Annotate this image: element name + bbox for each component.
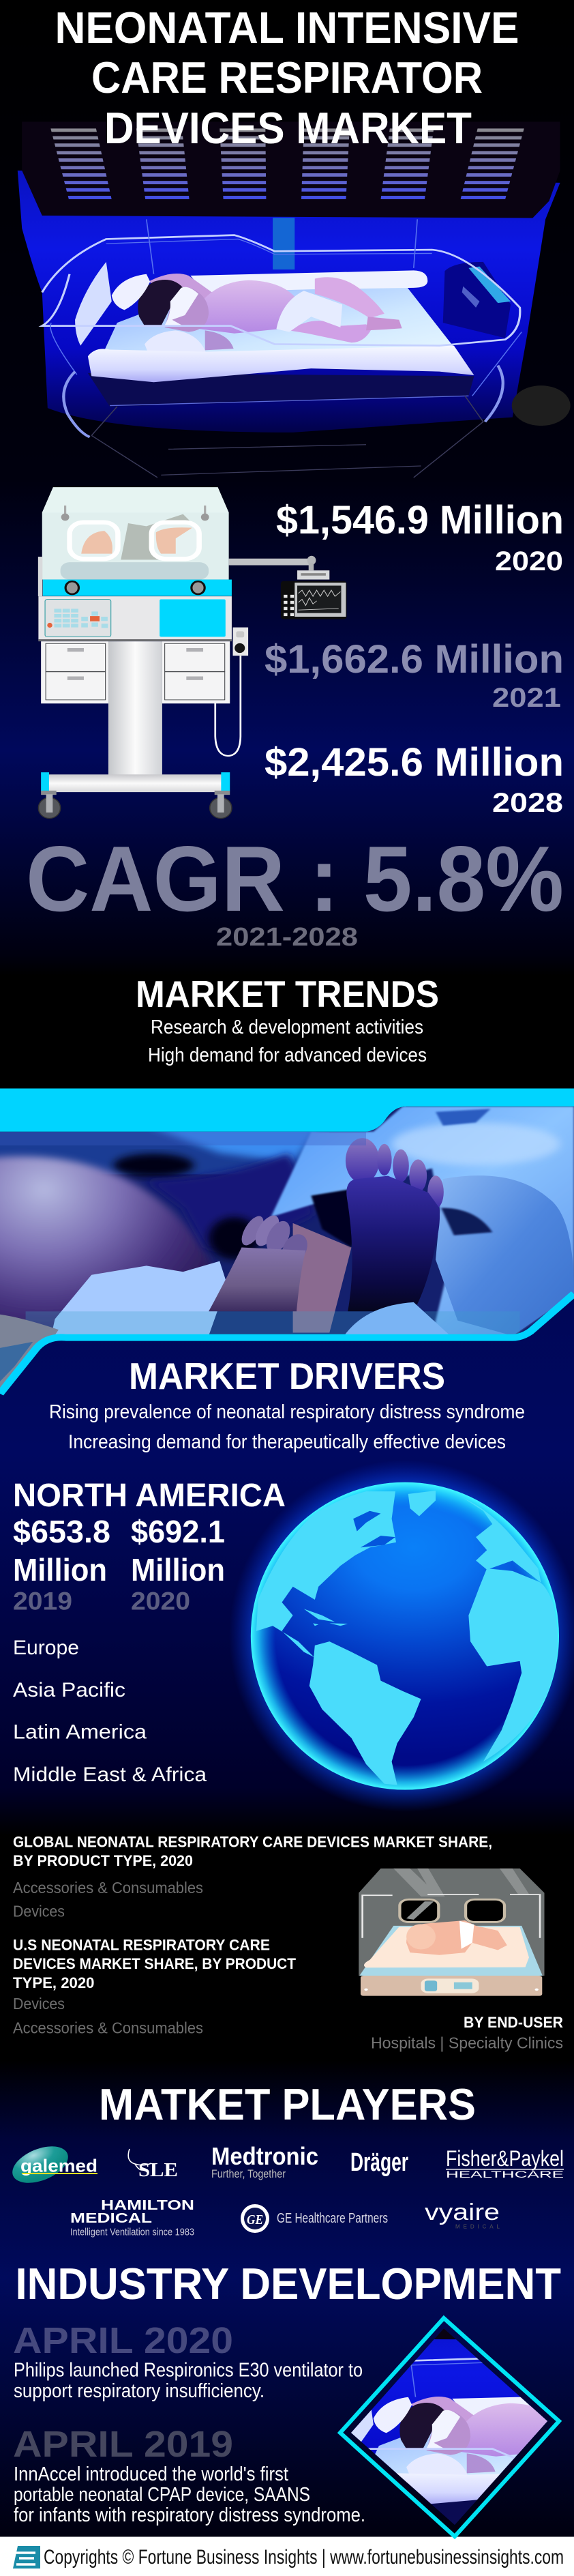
logo: Medtronic: Medtronic bbox=[211, 2142, 318, 2170]
development: April 2020: Philips launched Respironics E30 ventilator to bbox=[14, 2360, 363, 2382]
market players heading: MATKET PLAYERS bbox=[99, 2079, 476, 2129]
market size figures: $1,546.9 Million bbox=[276, 498, 564, 542]
logo: Vyaire Medical: MEDICAL bbox=[455, 2224, 500, 2230]
regional figures: 2020 bbox=[131, 1587, 190, 1615]
regional figures bbox=[13, 1478, 286, 1786]
regional figures: 2019 bbox=[13, 1587, 72, 1615]
logo: Medtronic: Further, Together bbox=[211, 2167, 286, 2180]
regional figures: Europe bbox=[13, 1637, 79, 1659]
logo: GE Healthcare Partners: GE bbox=[247, 2212, 263, 2227]
footer bar bbox=[0, 2536, 574, 2576]
globe bbox=[229, 1460, 574, 1812]
regional figures: Million bbox=[13, 1552, 107, 1587]
logo: Hamilton Medical bbox=[70, 2198, 194, 2238]
development: April 2019: for infants with respiratory distress syndrome. bbox=[14, 2504, 365, 2526]
market share by product type: BY PRODUCT TYPE, 2020 bbox=[13, 1852, 193, 1869]
by end-user bbox=[371, 2014, 563, 2052]
market share by product type: U.S NEONATAL RESPIRATORY CARE bbox=[13, 1936, 270, 1954]
market share by product type: GLOBAL NEONATAL RESPIRATORY CARE DEVICES MARKET SHARE, bbox=[13, 1834, 492, 1850]
development: April 2019: APRIL 2019 bbox=[13, 2424, 233, 2465]
market size figures: 2028 bbox=[492, 788, 563, 818]
title: CARE RESPIRATOR bbox=[91, 53, 483, 102]
logo: Fisher & Paykel Healthcare: HEALTHCARE bbox=[446, 2169, 564, 2180]
market size figures: $2,425.6 Million bbox=[265, 740, 564, 785]
logo: galemed bbox=[7, 2139, 97, 2190]
regional figures: Asia Pacific bbox=[13, 1679, 125, 1701]
development: April 2020: APRIL 2020 bbox=[13, 2320, 233, 2361]
logo: galemed: galemed bbox=[20, 2156, 97, 2176]
regional figures: $692.1 bbox=[131, 1514, 225, 1549]
logo: Dräger: Dräger bbox=[350, 2148, 408, 2177]
market share by product type: Accessories & Consumables bbox=[13, 1879, 203, 1897]
market drivers: Rising prevalence of neonatal respiratory distress syndrome bbox=[49, 1401, 525, 1423]
market trends bbox=[136, 973, 439, 1066]
market size figures: 2021 bbox=[492, 683, 561, 713]
regional figures: NORTH AMERICA bbox=[13, 1478, 286, 1514]
logo: Vyaire Medical: vyaire bbox=[425, 2199, 500, 2225]
market drivers: MARKET DRIVERS bbox=[129, 1355, 445, 1397]
market trends: MARKET TRENDS bbox=[136, 973, 439, 1015]
development: April 2019: InnAccel introduced the world's first bbox=[14, 2463, 288, 2485]
regional figures: Middle East & Africa bbox=[13, 1763, 207, 1786]
regional figures: Latin America bbox=[13, 1721, 147, 1744]
banner photo: newborn feet under blue light bbox=[0, 1089, 574, 1394]
market share by product type: Devices bbox=[13, 1995, 65, 2012]
title: NEONATAL INTENSIVE bbox=[55, 3, 519, 53]
regional figures: Million bbox=[131, 1552, 225, 1587]
regional figures: $653.8 bbox=[13, 1514, 110, 1549]
logo: Hamilton Medical: MEDICAL bbox=[70, 2211, 152, 2226]
market share by product type: Devices bbox=[13, 1903, 65, 1920]
by end-user: Hospitals | Specialty Clinics bbox=[371, 2034, 563, 2052]
logo: SLE bbox=[128, 2149, 178, 2181]
logo: Fisher & Paykel Healthcare bbox=[446, 2146, 564, 2180]
market drivers: Increasing demand for therapeutically effective devices bbox=[68, 1431, 506, 1453]
title: DEVICES MARKET bbox=[104, 103, 472, 153]
by end-user: BY END-USER bbox=[464, 2014, 563, 2031]
industry development heading: INDUSTRY DEVELOPMENT bbox=[15, 2259, 561, 2309]
market size figures bbox=[265, 498, 564, 818]
market size figures: 2020 bbox=[495, 546, 563, 576]
logo: Vyaire Medical bbox=[425, 2199, 500, 2230]
market share by product type: DEVICES MARKET SHARE, BY PRODUCT bbox=[13, 1955, 297, 1972]
illustration: baby in closed incubator bbox=[359, 1869, 545, 1996]
illustration: infant incubator with monitor bbox=[38, 487, 347, 819]
market share by product type: Accessories & Consumables bbox=[13, 2019, 203, 2037]
diamond photo frame bbox=[337, 2315, 562, 2539]
logo: Medtronic bbox=[211, 2142, 318, 2180]
development: April 2020: support respiratory insufficiency. bbox=[14, 2380, 265, 2402]
logo: Hamilton Medical: Intelligent Ventilation since 1983 bbox=[70, 2227, 194, 2238]
logo: GE Healthcare Partners: GE Healthcare Partners bbox=[277, 2211, 388, 2226]
CAGR: 2021-2028 bbox=[216, 923, 358, 952]
logo: GE Healthcare Partners bbox=[241, 2205, 388, 2232]
market size figures: $1,662.6 Million bbox=[265, 637, 564, 682]
market trends: High demand for advanced devices bbox=[148, 1044, 427, 1066]
market share by product type bbox=[13, 1834, 492, 2037]
development: April 2019 bbox=[13, 2424, 365, 2526]
market share by product type: TYPE, 2020 bbox=[13, 1974, 94, 1991]
title bbox=[55, 3, 519, 153]
logo: SLE: SLE bbox=[138, 2160, 178, 2181]
hero photo: baby in phototherapy bassinet bbox=[18, 122, 571, 478]
market trends: Research & development activities bbox=[151, 1016, 423, 1038]
development: April 2019: portable neonatal CPAP device, SAANS bbox=[14, 2484, 310, 2506]
development: April 2020 bbox=[13, 2320, 363, 2402]
logo: Hamilton Medical: HAMILTON bbox=[101, 2198, 194, 2213]
market drivers bbox=[49, 1355, 525, 1453]
